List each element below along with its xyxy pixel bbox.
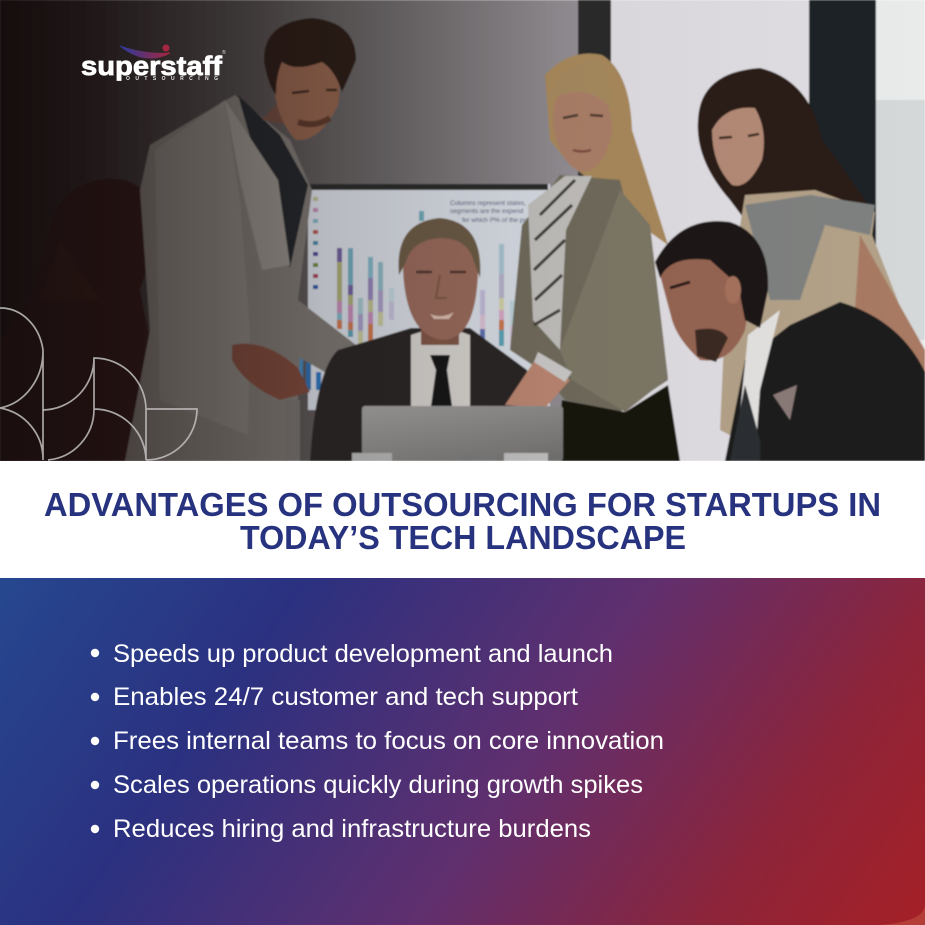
panel: advantages list <box>0 578 925 925</box>
bullet list: Scales operations quickly during growth spikes <box>113 771 643 799</box>
logo: Superstaff Outsourcing: ® <box>222 49 226 56</box>
laptop <box>352 406 563 461</box>
title band <box>0 461 925 578</box>
blonde woman pointing <box>505 54 680 461</box>
office wall and windows <box>0 0 925 461</box>
dark-haired woman at right <box>698 68 925 461</box>
presentation screen with bar chart: segments are the expend <box>450 208 524 215</box>
logo swoosh <box>120 44 170 58</box>
presentation screen with bar chart <box>298 184 550 410</box>
logo: Superstaff Outsourcing: OUTSOURCING <box>126 76 218 82</box>
standing man in light suit <box>125 18 356 461</box>
seated man at laptop <box>310 218 545 461</box>
bullet list: Reduces hiring and infrastructure burdens <box>113 815 591 843</box>
decorative outline shapes <box>0 308 197 460</box>
title: ADVANTAGES OF OUTSOURCING FOR STARTUPS IN <box>44 486 881 523</box>
presentation screen with bar chart: fer which P% of the po <box>462 217 527 224</box>
title: TODAY’S TECH LANDSCAPE <box>240 519 686 556</box>
logo: Superstaff Outsourcing: superstaff <box>81 51 223 81</box>
bullet list: Frees internal teams to focus on core innovation <box>113 727 664 755</box>
bullet list: Speeds up product development and launch <box>113 640 613 668</box>
hero photo: business team around a laptop <box>0 0 925 461</box>
man in black suit in foreground <box>655 221 925 461</box>
bullet list: Enables 24/7 customer and tech support <box>113 683 578 711</box>
title <box>44 486 881 556</box>
bullet list <box>91 640 664 843</box>
presentation screen with bar chart: Columns represent states, <box>450 200 526 207</box>
woman in silhouette at left <box>88 179 148 461</box>
